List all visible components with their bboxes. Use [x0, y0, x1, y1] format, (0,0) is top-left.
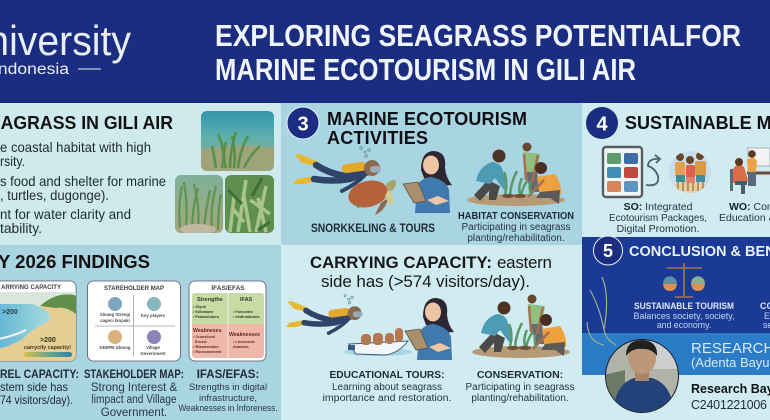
number badge 5: [594, 236, 622, 265]
caption: carrying capacity: stem side has: [0, 380, 68, 394]
caption: SO strategy: [609, 201, 707, 235]
caption: stakeholder map: Strong Interest &: [91, 382, 177, 394]
caption: habitat conservation: HABITAT CONSERVATION: [458, 210, 574, 222]
card: stakeholder map: cagoci Ikopaki: [100, 318, 130, 323]
caption: second conclusion: [760, 301, 770, 330]
heading: findings: Y 2026 FINDINGS: [0, 252, 150, 272]
card: stakeholder map: Village: [146, 345, 160, 350]
number badge 5: 5: [603, 241, 613, 261]
card: stakeholder map: Government: [140, 351, 166, 356]
card: IFAS/EFAS: • Rissarnotion: [193, 345, 219, 349]
icon: diver: [293, 147, 381, 191]
caption: stakeholder map: Government.: [101, 407, 167, 419]
icon: sea turtle: [345, 177, 396, 215]
icon: tour boat: [344, 328, 412, 356]
photo: seagrass meadow: [175, 175, 223, 234]
card: IFAS/EFAS: • Prabnolutors: [193, 315, 219, 319]
bullet text: s food and shelter for marine: [0, 173, 166, 189]
caption: second conclusion: E: [764, 311, 770, 321]
caption: carrying capacity: 74 visitors/day).: [0, 393, 73, 407]
research strip: [582, 333, 770, 375]
panel: carrying capacity: [281, 245, 582, 420]
icon: balance scale: [663, 263, 705, 297]
panel: seagrass in Gili Air: [0, 111, 274, 236]
icon: planting group: [472, 294, 570, 358]
number badge 4: [586, 107, 618, 139]
card: IFAS/EFAS: • Funcelies: [233, 310, 253, 314]
researcher portrait: [604, 339, 680, 413]
caption: sustainable tourism: and economy.: [657, 320, 711, 330]
caption: conservation: CONSERVATION:: [477, 369, 563, 381]
header band: [0, 0, 770, 103]
caption: carrying capacity: [0, 367, 79, 407]
icon: guide with clipboard: [403, 151, 452, 213]
card: IFAS/EFAS: • Glynk: [193, 305, 207, 309]
bullet text: e coastal habitat with high: [0, 139, 151, 155]
bullet text: tability.: [0, 220, 42, 236]
caption: conservation: [466, 369, 574, 404]
bullet text: [0, 139, 166, 236]
photo: seagrass underwater: [201, 111, 274, 171]
panel: sustainable strategies: [586, 107, 770, 234]
card: IFAS/EFAS: Strengthe: [197, 297, 223, 303]
heading: carrying capacity: eastern: [497, 253, 552, 272]
card: carrying capacity: [0, 281, 78, 362]
bullet text: , turtles, dugonge).: [0, 187, 109, 203]
number badge 4: 4: [596, 114, 608, 136]
card: stakeholder map: Sinang Strengi: [100, 312, 130, 317]
panel: conclusion and benefits: [582, 236, 770, 413]
caption: carrying capacity: REL CAPACITY:: [0, 367, 79, 381]
card: stakeholder map: STAREHOLDER MAP: [104, 285, 164, 292]
caption: habitat conservation: planting/rehabilitation.: [467, 233, 565, 244]
caption: IFAS/EFAS: infrastructure,: [199, 393, 257, 404]
card: stakeholder map: Key players: [141, 313, 166, 318]
card: carrying capacity: >200: [2, 309, 18, 316]
number badge 3: [287, 107, 319, 139]
panel: key findings: [0, 245, 281, 420]
icon: tourists in circle: [669, 151, 711, 193]
caption: IFAS/EFAS: Weaknesses in Inforeness.: [178, 403, 278, 414]
caption: SO strategy: Ecotourism Packages,: [609, 212, 707, 224]
icon: phone with apps: [603, 147, 642, 197]
heading: activities: MARINE ECOTOURISM: [327, 109, 527, 129]
card: IFAS/EFAS: Erossi: [195, 340, 207, 344]
card: IFAS/EFAS: Weaknesses: [229, 332, 260, 338]
card: stakeholder map: [88, 281, 180, 361]
card: IFAS/EFAS: Weabneses: [193, 328, 222, 334]
heading: activities: ACTIVITIES: [327, 128, 428, 148]
heading: activities: [327, 109, 527, 148]
caption: sustainable tourism: SUSTAINABLE TOURISM: [634, 301, 734, 311]
title: [215, 18, 741, 87]
caption: IFAS/EFAS: [178, 369, 278, 414]
card: IFAS/EFAS: [189, 281, 266, 361]
panel: marine ecotourism activities: [281, 103, 582, 245]
number badge 3: 3: [297, 114, 309, 136]
caption: habitat conservation: [458, 210, 574, 244]
caption: educational tours: [322, 369, 452, 404]
caption: conservation: planting/rehabilitation.: [471, 393, 569, 404]
card: IFAS/EFAS: IFAS: [240, 297, 253, 303]
heading: carrying capacity: side has (>574 visitors/day).: [321, 272, 530, 291]
icon: seagrass sprig: [587, 277, 616, 345]
card: carrying capacity: ARRYING CAPACITY: [1, 284, 62, 291]
caption: SO strategy: SO: Integrated: [624, 201, 693, 213]
icon: planting group: [467, 142, 565, 206]
researcher name and ID: C2401221006: [691, 398, 767, 412]
bullet text: nt for water clarity and: [0, 206, 131, 222]
card: IFAS/EFAS: • Cronsileed: [193, 335, 216, 339]
caption: stakeholder map: limpact and Village: [92, 394, 176, 406]
caption: educational tours: Learning about seagrass: [332, 382, 442, 393]
photo: seagrass blades: [225, 175, 274, 233]
card: IFAS/EFAS: Anasses: [233, 345, 249, 349]
caption: conservation: Participating in seagrass: [466, 382, 574, 393]
card: stakeholder map: KEEPB Gloong: [99, 345, 131, 350]
caption: IFAS/EFAS: Strengths in digital: [189, 382, 267, 393]
card: IFAS/EFAS: • Ishtirnalutors: [233, 315, 260, 319]
card: IFAS/EFAS: • Rovssmement: [193, 350, 222, 354]
caption: sustainable tourism: [634, 301, 734, 330]
researcher name and ID: [691, 382, 770, 412]
card: IFAS/EFAS: IFAS/EFAS: [211, 285, 245, 292]
caption: WO strategy: [719, 201, 770, 224]
icon: guide with clipboard: [405, 298, 454, 360]
caption: sustainable tourism: Balances society, society,: [634, 311, 734, 321]
heading: carrying capacity: [310, 253, 552, 291]
researcher heading: [691, 340, 770, 370]
card: carrying capacity: carrycily capacity!: [24, 345, 71, 351]
caption: snorkeling: SNORKKELING & TOURS: [311, 223, 435, 235]
caption: IFAS/EFAS: IFAS/EFAS:: [197, 369, 259, 381]
heading: carrying capacity: CARRYING CAPACITY:: [310, 253, 492, 272]
card: IFAS/EFAS: • Kidrwiane: [193, 310, 214, 314]
title: MARINE ECOTOURISM IN GILI AIR: [215, 52, 636, 87]
card: carrying capacity: >200: [40, 337, 56, 344]
caption: educational tours: EDUCATIONAL TOURS:: [330, 369, 444, 381]
caption: stakeholder map: STAKEHOLDER MAP:: [84, 369, 184, 381]
icon: diver: [286, 295, 362, 333]
caption: stakeholder map: [84, 369, 184, 419]
card: IFAS/EFAS: • Lisneuwss: [233, 340, 255, 344]
caption: SO strategy: Digital Promotion.: [617, 223, 699, 235]
caption: habitat conservation: Participating in seagrass: [462, 222, 570, 233]
arrow: S curve: [646, 155, 660, 185]
icon: meeting group: [730, 148, 770, 194]
caption: educational tours: importance and restoration.: [322, 393, 452, 404]
bullet text: rsity.: [0, 153, 25, 169]
